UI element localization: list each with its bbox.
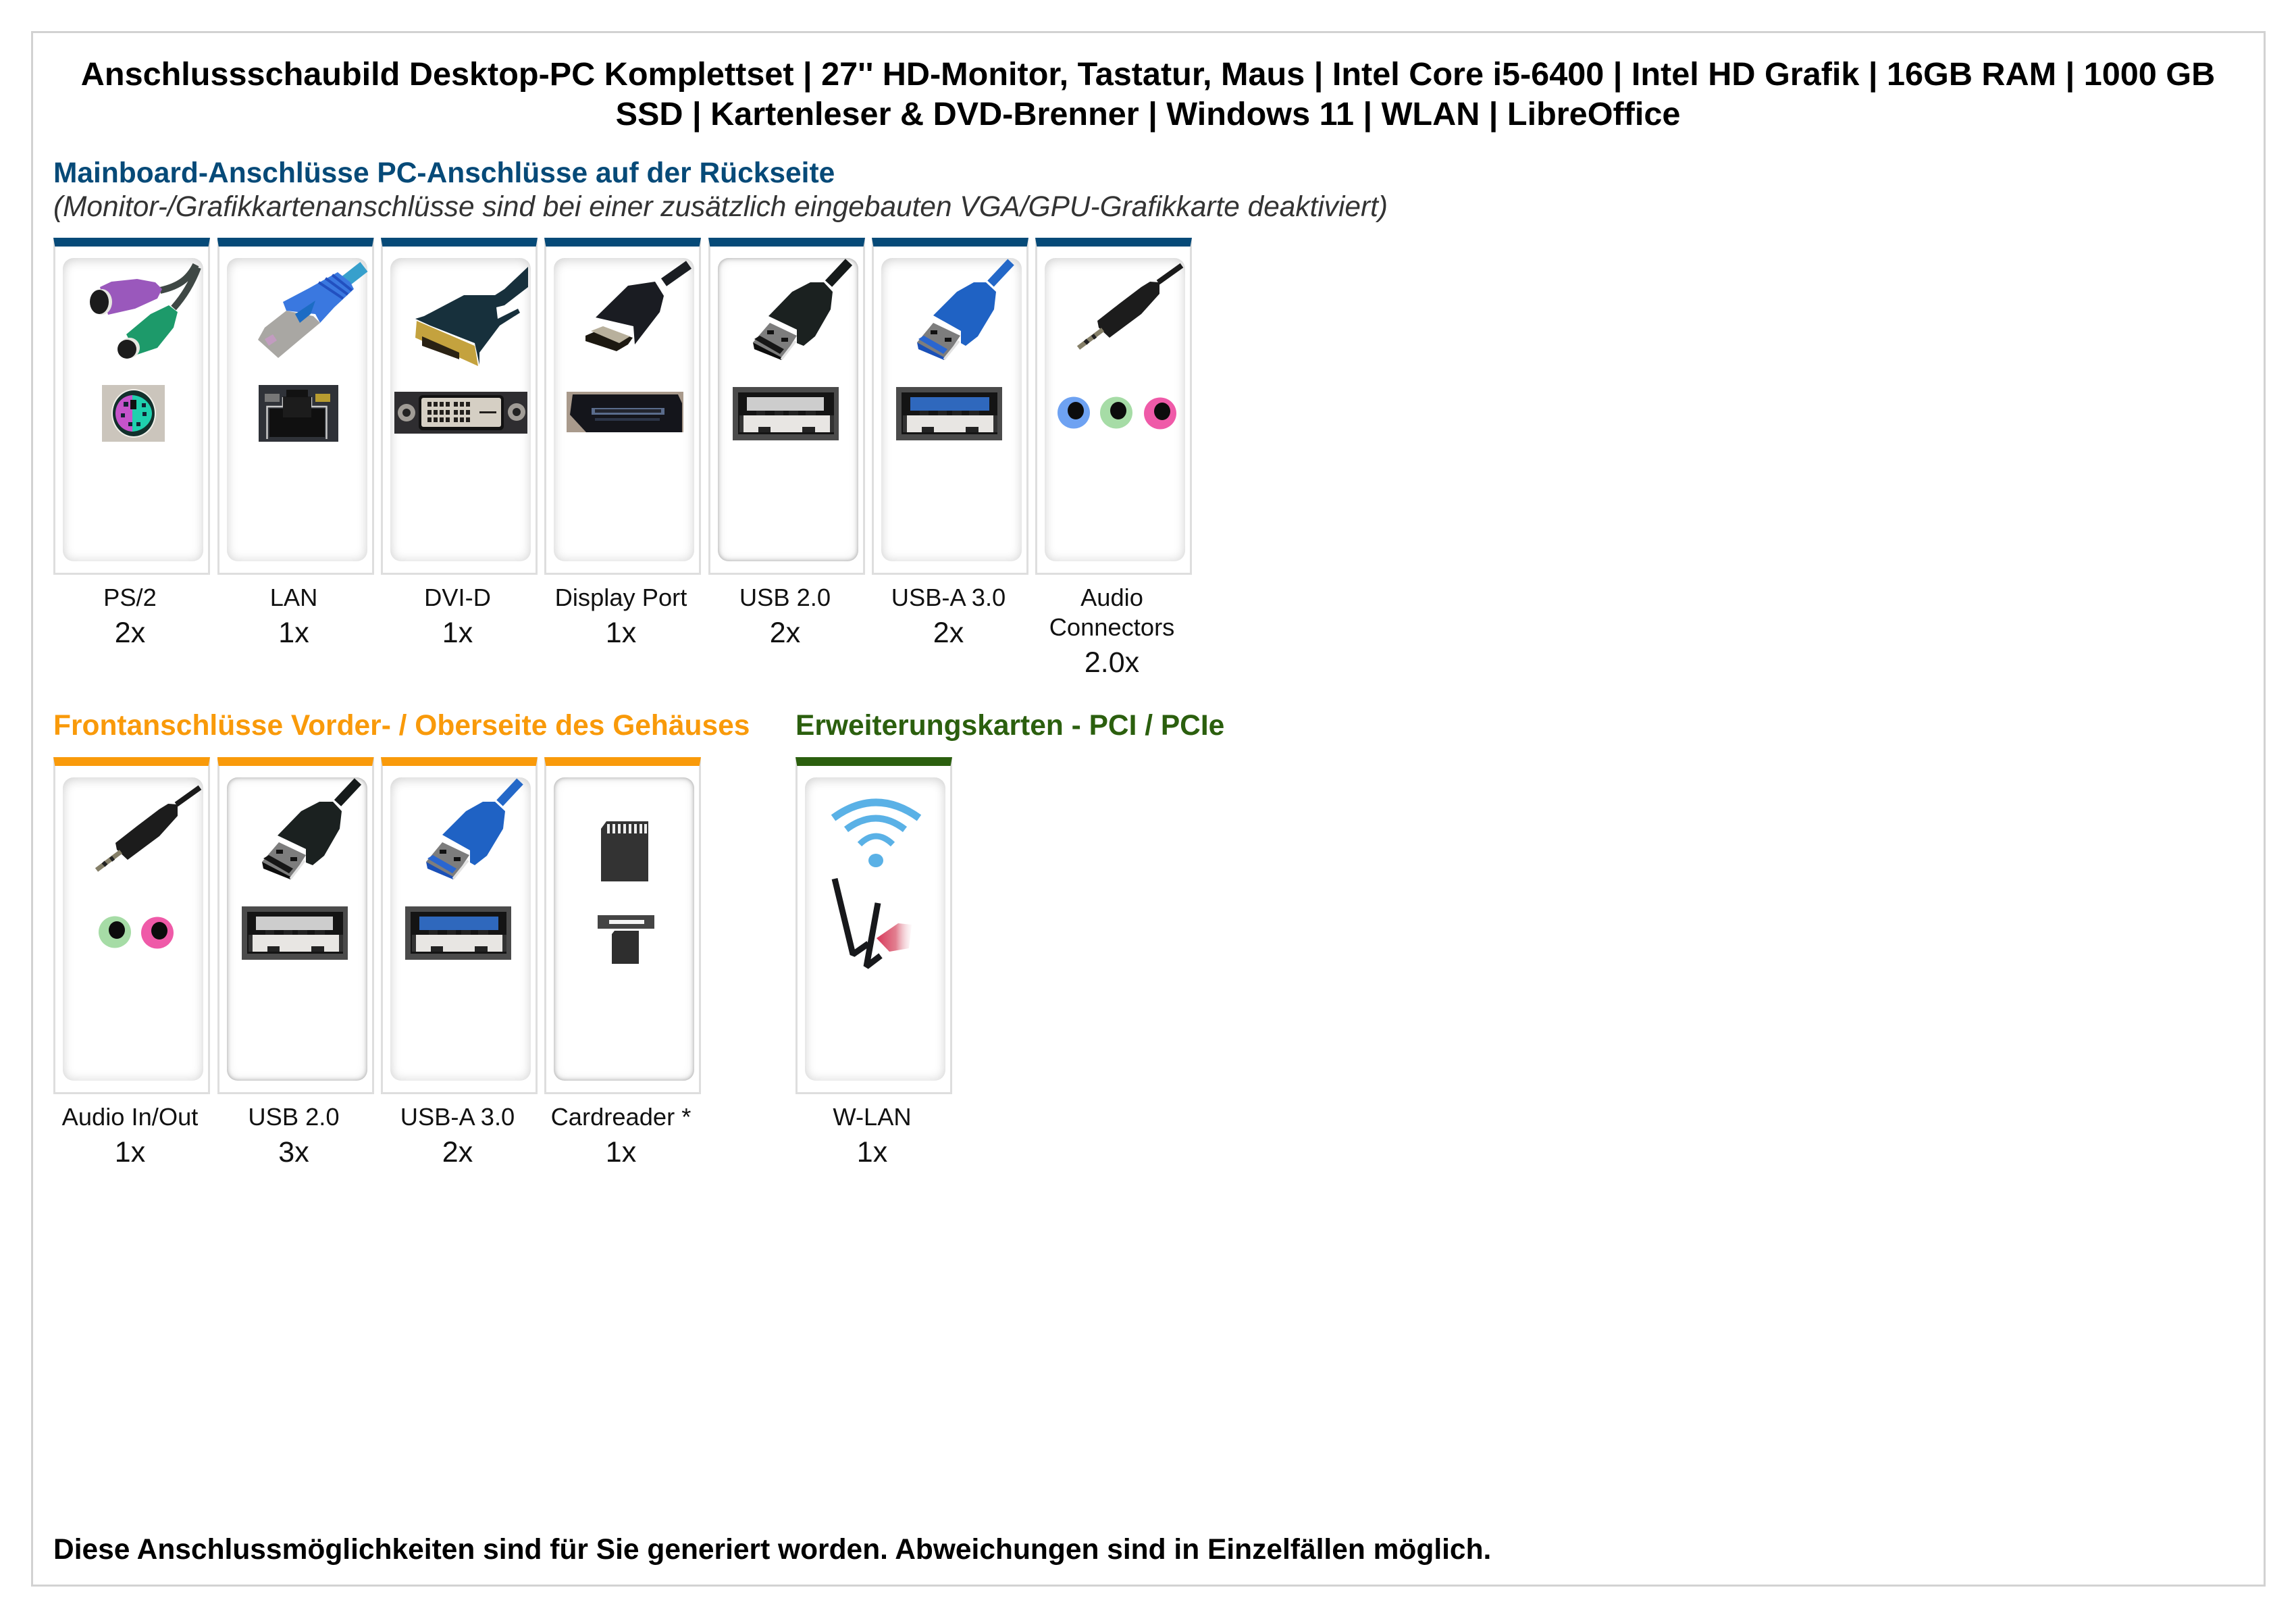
count: 2.0x xyxy=(1085,646,1139,679)
label xyxy=(1028,583,1195,642)
count: 1x xyxy=(857,1136,887,1168)
icon: USB plug and port xyxy=(708,238,865,574)
panel: USB 2.0 front xyxy=(217,757,374,1203)
header bar xyxy=(708,238,865,247)
inner panel xyxy=(718,258,858,561)
heading: front ports: Frontanschlüsse Vorder- / Oberseite des Gehäuses xyxy=(53,710,750,742)
icon: LAN plug and port xyxy=(258,262,367,442)
count: 2x xyxy=(442,1136,473,1168)
label: Connectors xyxy=(1049,613,1174,640)
panel: Cardreader xyxy=(544,757,701,1203)
icon: DVI plug and port xyxy=(394,267,528,434)
inner panel xyxy=(390,258,531,561)
icon: audio jack and sockets xyxy=(1035,238,1192,574)
title: Anschlussschaubild Desktop-PC Komplettset | 27'' HD-Monitor, Tastatur, Maus | Intel Core i5-6400 | Intel HD Grafik | 16GB RAM | 1000 GB xyxy=(81,56,2215,93)
icon: USB plug and port xyxy=(217,757,374,1093)
icon: PS/2 plugs and port xyxy=(90,263,201,442)
card border xyxy=(381,238,538,575)
count: 1x xyxy=(606,617,636,649)
header bar xyxy=(381,238,538,247)
count: 3x xyxy=(278,1136,309,1168)
inner panel xyxy=(63,258,203,561)
footer note: Diese Anschlussmöglichkeiten sind für Sie generiert worden. Abweichungen sind in Einzelfällen möglich. xyxy=(53,1534,1491,1566)
inner panel xyxy=(1045,258,1185,561)
label: USB-A 3.0 xyxy=(891,584,1006,611)
inner panel xyxy=(554,258,694,561)
card border xyxy=(53,757,210,1094)
header bar xyxy=(217,757,374,766)
count: 2x xyxy=(115,617,145,649)
icon: DisplayPort plug and port xyxy=(544,238,701,574)
icon: wifi and antenna card xyxy=(795,757,952,1093)
heading: expansion cards: Erweiterungskarten - PCI / PCIe xyxy=(795,710,1224,742)
header bar xyxy=(1035,238,1192,247)
label: USB 2.0 xyxy=(248,1103,340,1131)
icon: memory card and reader slot xyxy=(544,757,701,1093)
panel: Audio In/Out xyxy=(53,757,210,1203)
panel: Display Port xyxy=(544,238,701,649)
panel: W-LAN xyxy=(795,757,952,1203)
card border xyxy=(708,238,865,575)
panel: DVI-D xyxy=(381,238,538,649)
card border xyxy=(872,238,1028,575)
panel: USB-A 3.0 xyxy=(872,238,1028,684)
panel: USB 2.0 xyxy=(708,238,865,684)
label: LAN xyxy=(270,584,317,611)
label: W-LAN xyxy=(833,1103,912,1131)
card border xyxy=(795,757,952,1094)
inner panel xyxy=(227,777,367,1081)
header bar xyxy=(53,757,210,766)
count: 2x xyxy=(933,617,964,649)
title xyxy=(81,56,2215,132)
card border xyxy=(53,238,210,575)
header bar xyxy=(544,238,701,247)
header bar xyxy=(217,238,374,247)
icon: USB 3 plug and port xyxy=(381,757,538,1093)
icon: audio jack and sockets xyxy=(53,757,210,1093)
header bar xyxy=(795,757,952,766)
heading: Mainboard: Mainboard-Anschlüsse PC-Anschlüsse auf der Rückseite xyxy=(53,157,835,189)
panel: Audio Connectors xyxy=(1035,238,1192,684)
label: Cardreader * xyxy=(551,1103,691,1131)
panel: USB-A 3.0 front xyxy=(381,757,538,1203)
inner panel xyxy=(881,258,1022,561)
count: 1x xyxy=(606,1136,636,1168)
note: graphics card: (Monitor-/Grafikkartenanschlüsse sind bei einer zusätzlich eingebauten VGA/GPU-Grafikkarte deaktiviert) xyxy=(53,190,1388,222)
inner panel xyxy=(554,777,694,1081)
icon: USB 3 plug and port xyxy=(872,238,1028,574)
label: Display Port xyxy=(555,584,687,611)
header bar xyxy=(872,238,1028,247)
card border xyxy=(544,238,701,575)
label: PS/2 xyxy=(103,584,157,611)
inner panel xyxy=(227,258,367,561)
label: DVI-D xyxy=(424,584,491,611)
count: 1x xyxy=(115,1136,145,1168)
inner panel xyxy=(63,777,203,1081)
header bar xyxy=(544,757,701,766)
card border xyxy=(381,757,538,1094)
label: Audio xyxy=(1080,584,1143,611)
header bar xyxy=(381,757,538,766)
panel: LAN xyxy=(217,238,374,649)
title: SSD | Kartenleser & DVD-Brenner | Windows 11 | WLAN | LibreOffice xyxy=(616,96,1680,132)
count: 1x xyxy=(442,617,473,649)
card border xyxy=(217,238,374,575)
label: Audio In/Out xyxy=(62,1103,198,1131)
card border xyxy=(544,757,701,1094)
count: 2x xyxy=(770,617,800,649)
label: USB-A 3.0 xyxy=(400,1103,515,1131)
panel: PS/2 xyxy=(53,238,210,649)
label: USB 2.0 xyxy=(739,584,831,611)
card border xyxy=(217,757,374,1094)
card border xyxy=(1035,238,1192,575)
inner panel xyxy=(805,777,945,1081)
count: 1x xyxy=(278,617,309,649)
header bar xyxy=(53,238,210,247)
inner panel xyxy=(390,777,531,1081)
